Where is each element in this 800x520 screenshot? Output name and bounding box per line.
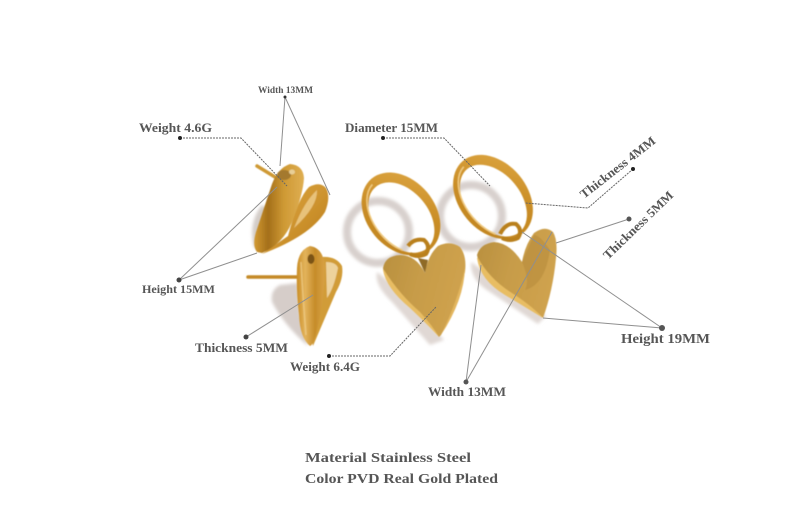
labels: Weight 4.6G	[139, 120, 212, 135]
heart pendant	[383, 243, 465, 337]
hinge	[500, 224, 520, 240]
labels	[139, 85, 710, 399]
stud back lobe	[305, 257, 342, 346]
labels: Diameter 15MM	[345, 120, 438, 135]
stud pin	[257, 166, 275, 177]
heart pendant	[477, 229, 557, 318]
hinge	[408, 240, 428, 256]
material and colour text: Material Stainless Steel	[305, 451, 471, 466]
stud front body	[297, 246, 325, 346]
earring: right hoop	[437, 139, 557, 318]
earring: left hoop	[345, 157, 465, 337]
earring: stud top	[254, 164, 328, 254]
labels: Width 13MM	[428, 384, 506, 399]
labels: Height 15MM	[142, 284, 215, 296]
hoop	[345, 157, 457, 271]
labels: Thickness 4MM	[577, 134, 659, 201]
material and colour text: Color PVD Real Gold Plated	[305, 472, 498, 487]
labels: Weight 6.4G	[290, 359, 360, 374]
stud pin	[248, 275, 300, 279]
labels: Width 13MM	[258, 85, 314, 95]
labels: Height 19MM	[621, 331, 710, 346]
labels: Thickness 5MM	[195, 341, 288, 355]
dotted callout lines	[180, 138, 633, 356]
hoop	[437, 139, 549, 255]
callout dots	[176, 96, 665, 384]
material and colour text	[305, 451, 498, 487]
stud back lobe	[262, 184, 328, 254]
earring: stud bottom	[248, 246, 342, 346]
stud front body	[254, 164, 304, 253]
callout lines	[179, 97, 662, 382]
cast shadows	[252, 185, 546, 346]
labels: Thickness 5MM	[600, 188, 676, 262]
